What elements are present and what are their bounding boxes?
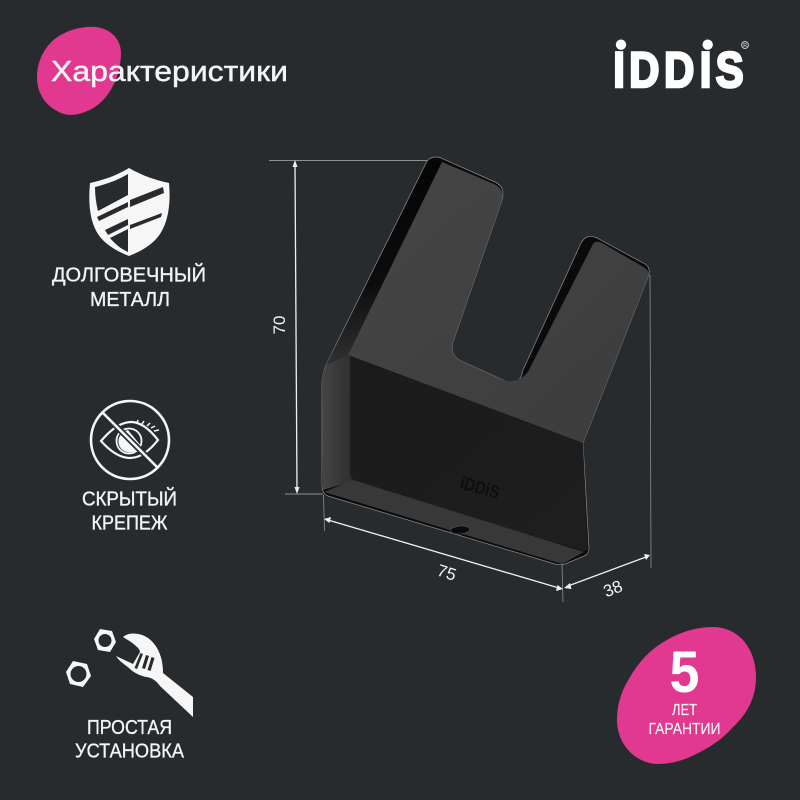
- hook top face, left prong and right prong: [348, 162, 649, 443]
- logo: iddis: D: [664, 42, 694, 98]
- feature: easy installation: УСТАНОВКА: [75, 740, 184, 763]
- icon: wrench: [116, 633, 193, 717]
- dimension: 38: [564, 275, 651, 601]
- product: hook with dimensions: [269, 157, 651, 602]
- feature: hidden fastening: [82, 401, 177, 534]
- feature: easy installation: [66, 629, 193, 763]
- dark front face: [350, 356, 588, 551]
- logo: iddis: S: [716, 42, 744, 98]
- label: СКРЫТЫЙ: [82, 487, 177, 511]
- warranty badge: ЛЕТ: [672, 702, 697, 719]
- dimension: 70: 70: [270, 316, 289, 334]
- feature: durable metal: МЕТАЛЛ: [90, 288, 170, 311]
- mounting hole: [450, 525, 470, 535]
- left side wall: [322, 355, 358, 490]
- embossed logo: iDDiS: [458, 473, 502, 503]
- title with pink blob: Характеристики: [51, 56, 288, 88]
- dimension: 70: [269, 160, 427, 494]
- left inner shadow band: [326, 160, 442, 365]
- dimension: 75: [324, 495, 563, 602]
- warranty badge: ГАРАНТИИ: [648, 721, 720, 738]
- warranty badge: [617, 627, 756, 764]
- bottom flange: [324, 480, 584, 564]
- title with pink blob: [37, 27, 288, 115]
- logo: iddis: I: [700, 42, 711, 98]
- logo: iddis: R: [743, 43, 747, 49]
- icon: crossed-out eye: [91, 401, 169, 479]
- hook body silhouette: [322, 157, 649, 565]
- icon: nuts: [66, 629, 116, 687]
- label: ДОЛГОВЕЧНЫЙ: [52, 262, 206, 286]
- feature: hidden fastening: КРЕПЕЖ: [92, 512, 168, 534]
- warranty badge: 5: [670, 640, 700, 705]
- label: ПРОСТАЯ: [87, 716, 172, 739]
- logo: iddis: D: [629, 42, 659, 98]
- icon: shield: [89, 168, 170, 256]
- feature: durable metal: [52, 168, 206, 311]
- dimension: 75: 75: [435, 561, 459, 585]
- logo: iddis: I: [613, 42, 625, 98]
- logo: iddis: [613, 40, 748, 98]
- dimension: 38: 38: [601, 577, 625, 601]
